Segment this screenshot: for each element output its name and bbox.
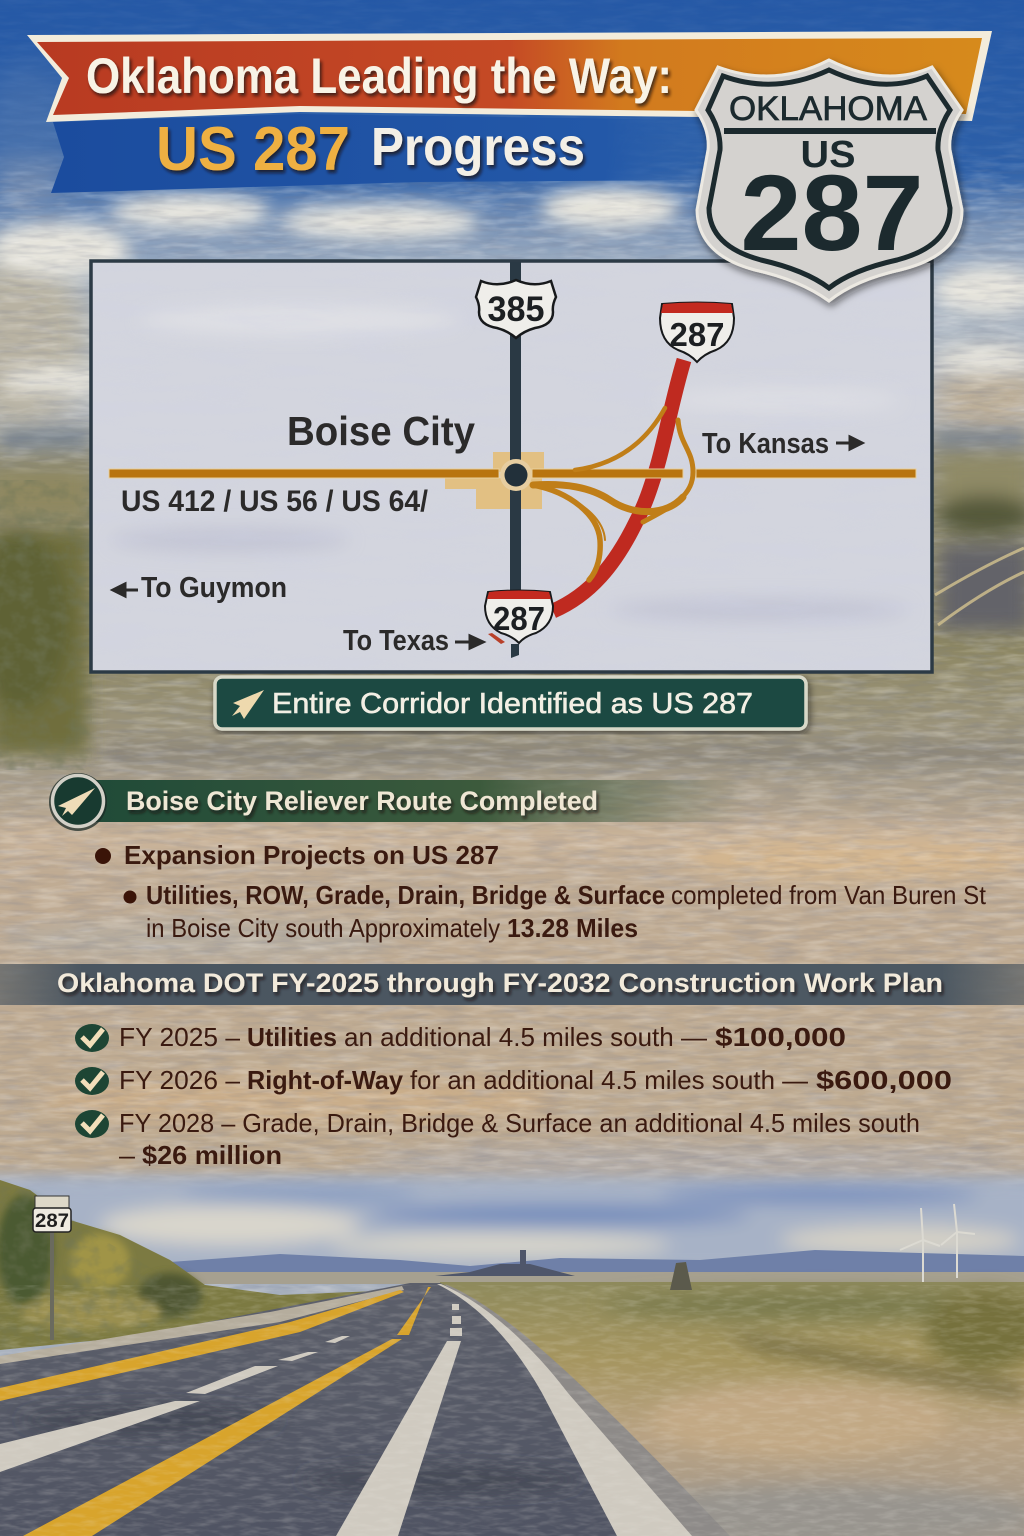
left road shoulder	[0, 1286, 404, 1364]
roadside streaks right of map	[935, 548, 1024, 625]
map paper texture	[93, 263, 930, 670]
white lane lines	[0, 1284, 692, 1536]
work plan heading: Oklahoma DOT FY-2025 through FY-2032 Construction Work Plan	[57, 968, 943, 998]
map panel	[91, 261, 932, 672]
shield 287 north: 287	[670, 316, 724, 353]
shield 287 north	[660, 302, 734, 362]
shield 287 south	[485, 590, 553, 643]
label To Kansas: To Kansas	[702, 428, 829, 460]
distant mountains	[170, 1250, 1024, 1282]
side field patches	[0, 432, 1024, 755]
title ribbon	[27, 31, 992, 193]
sub bullet text: 13.28 Miles	[507, 913, 638, 943]
left trees and brush	[0, 1180, 400, 1350]
right field	[440, 1282, 1024, 1536]
shield 385	[476, 280, 556, 338]
title line 2: US 287	[156, 115, 350, 184]
roundabout	[500, 459, 532, 491]
sky with clouds	[0, 1178, 1024, 1275]
icon: circular plane badge	[49, 773, 107, 831]
label US routes: US 412 / US 56 / US 64/	[121, 485, 429, 518]
FY 2028 item: –	[119, 1140, 136, 1170]
bottom highway scene	[0, 1178, 1024, 1536]
FY 2025 item: an additional 4.5 miles south —	[344, 1022, 707, 1052]
gravel shoulder right of road	[445, 1284, 730, 1536]
FY 2025 item: Utilities	[247, 1022, 337, 1052]
label To Texas: To Texas	[343, 625, 449, 657]
title line 1: Oklahoma Leading the Way:	[86, 48, 672, 104]
expansion projects list	[95, 840, 987, 943]
small route sign on post	[33, 1196, 71, 1340]
section: Boise City Reliever Route	[49, 773, 748, 831]
small route sign on post: 287	[35, 1211, 69, 1232]
red orange top ribbon	[27, 31, 992, 122]
yellow lane lines	[0, 1287, 431, 1536]
shield 287 south: 287	[493, 600, 545, 637]
FY 2026 item: for an additional 4.5 miles south —	[410, 1065, 808, 1095]
section banner	[78, 780, 748, 822]
distant town	[435, 1250, 575, 1276]
section: work plan	[0, 964, 1024, 1005]
title line 2: Progress	[371, 117, 585, 177]
FY 2025 item: FY 2025 –	[119, 1022, 241, 1052]
work plan banner	[0, 964, 1024, 1005]
large Oklahoma US 287 shield: OKLAHOMA	[729, 90, 927, 128]
title line 2	[156, 115, 585, 184]
shield 385: 385	[488, 290, 544, 329]
highway 385 vertical road	[510, 262, 521, 658]
FY 2026 item	[75, 1065, 952, 1095]
icon: paper plane	[232, 690, 264, 719]
label To Guymon: To Guymon	[141, 572, 287, 604]
FY 2026 item: $600,000	[816, 1065, 952, 1095]
pumpjack silhouette	[670, 1262, 692, 1290]
label Boise City: Boise City	[287, 408, 475, 454]
scene texture	[0, 1185, 1024, 1536]
work plan list	[75, 1022, 952, 1170]
sub bullet text: in Boise City south Approximately	[146, 913, 500, 943]
large Oklahoma US 287 shield: US	[800, 134, 856, 176]
section heading: Boise City Reliever Route Completed	[126, 786, 598, 816]
FY 2028 item	[75, 1108, 920, 1170]
interchange ramps	[533, 408, 693, 580]
large Oklahoma US 287 shield: 287	[740, 152, 924, 273]
FY 2028 item: FY 2028 – Grade, Drain, Bridge & Surface an additional 4.5 miles south	[119, 1108, 920, 1138]
sub bullet text: completed from Van Buren St	[671, 880, 987, 910]
FY 2026 item: FY 2026 –	[119, 1065, 241, 1095]
large Oklahoma US 287 shield	[696, 60, 962, 301]
road surface	[0, 1283, 650, 1536]
FY 2026 item: Right-of-Way	[247, 1065, 404, 1095]
town blocks	[445, 452, 544, 509]
FY 2025 item: $100,000	[715, 1022, 846, 1052]
sub bullet text	[124, 880, 987, 943]
green corridor sign	[215, 677, 806, 729]
blue lower ribbon	[51, 114, 702, 193]
bullet heading: Expansion Projects on US 287	[124, 840, 499, 870]
red US 287 route	[553, 360, 684, 611]
wind turbines	[900, 1204, 975, 1282]
east-west orange road	[109, 469, 916, 478]
FY 2028 item: $26 million	[142, 1140, 282, 1170]
sign text: Entire Corridor Identified as US 287	[272, 688, 753, 720]
FY 2025 item	[75, 1022, 846, 1052]
sub bullet text: Utilities, ROW, Grade, Drain, Bridge & Surface	[146, 880, 665, 910]
